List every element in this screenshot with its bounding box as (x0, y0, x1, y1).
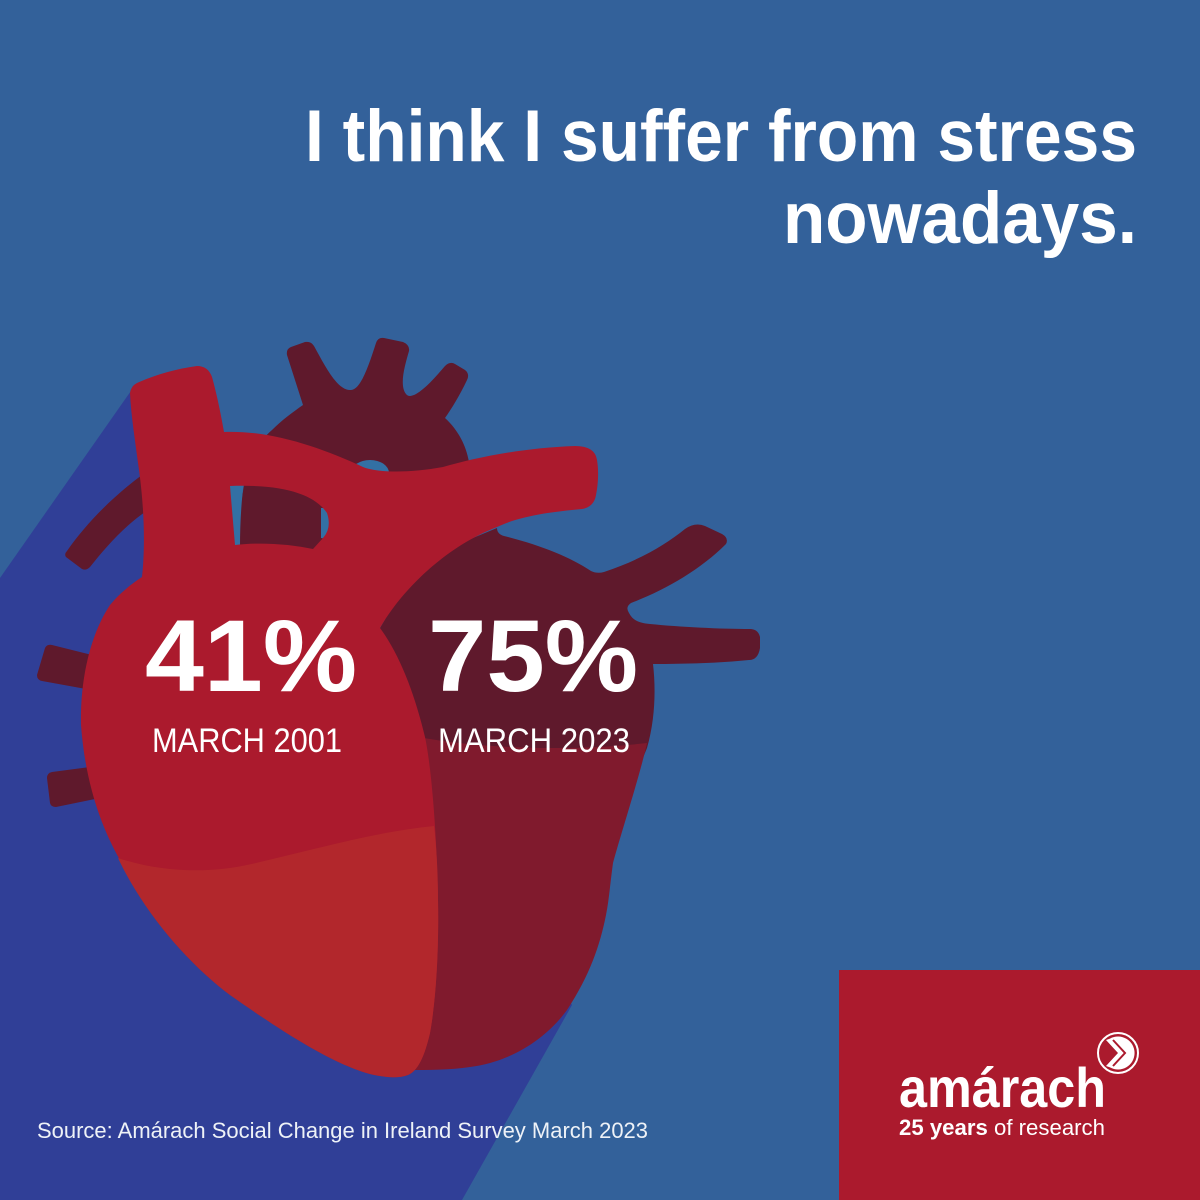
left ventricle, red front (81, 366, 598, 1077)
stat: 75% March 2023: MARCH 2023 (438, 722, 630, 760)
right atrium, dark upper part (380, 525, 760, 765)
stat: 41% March 2001: 41% (145, 599, 357, 713)
logo tagline: 25 years of research (899, 1115, 1105, 1140)
source note: Source: Amárach Social Change in Ireland Survey March 2023 (37, 1118, 648, 1143)
title: I think I suffer from stress (305, 96, 1137, 177)
title: nowadays. (783, 178, 1137, 259)
icon: chevron roundel (1098, 1033, 1138, 1073)
stat: 41% March 2001: MARCH 2001 (152, 722, 342, 760)
logo wordmark: amárach (899, 1056, 1106, 1119)
stat: 41% March 2001 (145, 599, 357, 760)
gaps in the arch (230, 460, 389, 548)
title (305, 96, 1137, 259)
stat: 75% March 2023 (428, 599, 638, 760)
stat: 75% March 2023: 75% (428, 599, 638, 713)
right ventricle, lighter 75% fill (405, 738, 647, 1070)
logo panel (839, 970, 1200, 1200)
back vessels and arch (37, 338, 469, 807)
lower red 41% fill (118, 826, 438, 1077)
long shadow of the heart (0, 388, 572, 1200)
heart illustration (37, 338, 760, 1077)
